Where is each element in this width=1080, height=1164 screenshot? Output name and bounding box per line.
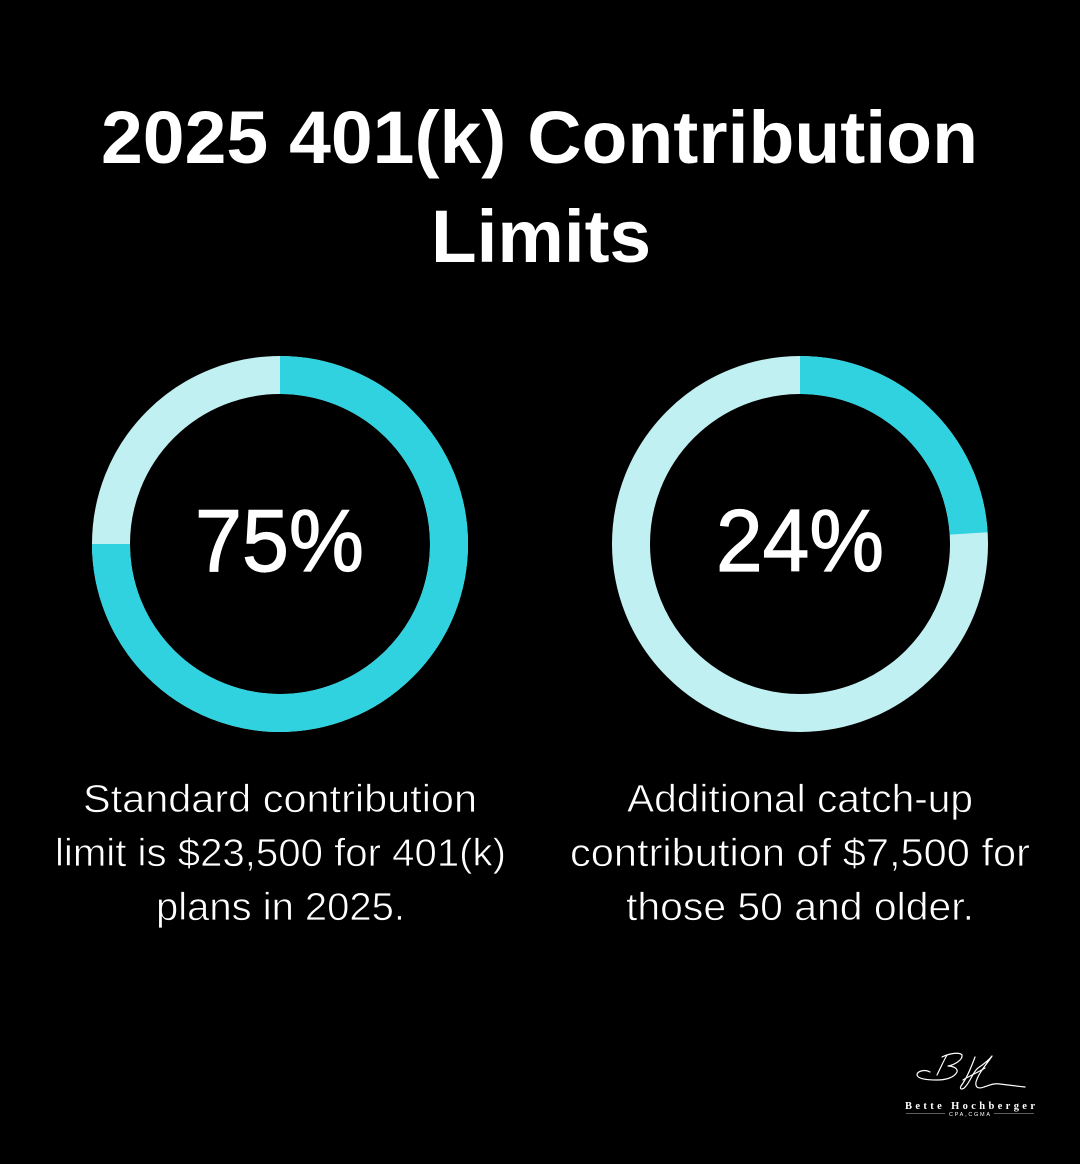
title bbox=[101, 96, 978, 278]
description: catch-up: those 50 and older. bbox=[626, 886, 974, 929]
description: standard limit bbox=[55, 778, 506, 929]
icon: BH monogram bbox=[917, 1053, 1025, 1089]
title: 2025 401(k) Contribution bbox=[101, 96, 978, 179]
description: catch-up: Additional catch-up bbox=[627, 778, 973, 821]
description: standard limit: limit is $23,500 for 401(k) bbox=[55, 832, 506, 875]
donut chart: 75% bbox=[111, 375, 449, 713]
description: catch-up bbox=[570, 778, 1030, 929]
logo name: Bette Hochberger bbox=[905, 1101, 1035, 1112]
value: 75%: 75% bbox=[195, 491, 364, 590]
logo: Bette Hochberger signature bbox=[905, 1053, 1035, 1118]
panel: catch-up contribution bbox=[570, 375, 1030, 929]
logo credentials: CPA,CGMA bbox=[949, 1112, 990, 1118]
value: 24%: 24% bbox=[716, 491, 884, 590]
donut chart: 24% bbox=[631, 375, 969, 713]
description: catch-up: contribution of $7,500 for bbox=[570, 832, 1030, 875]
description: standard limit: Standard contribution bbox=[83, 778, 477, 821]
title: Limits bbox=[431, 195, 651, 278]
description: standard limit: plans in 2025. bbox=[156, 886, 405, 929]
panel: standard contribution bbox=[55, 375, 506, 929]
